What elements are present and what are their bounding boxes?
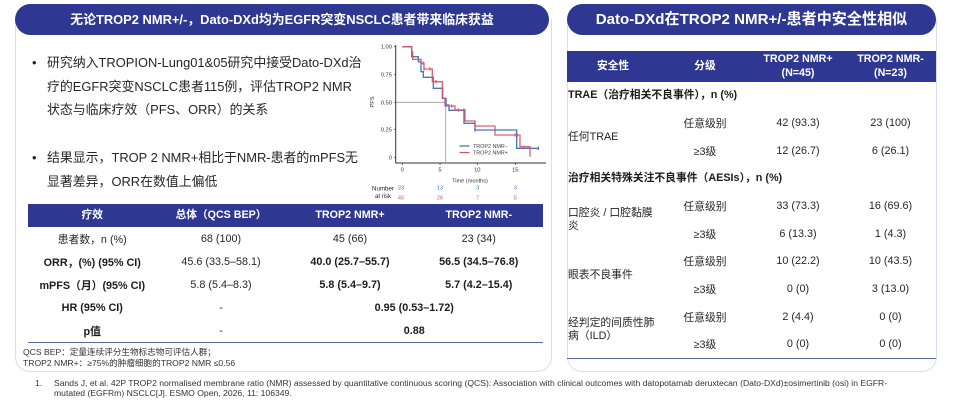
- table: efficacy results: ORR，(%) (95% CI): [44, 256, 141, 268]
- reference: [35, 378, 887, 398]
- text block: results bullet: •: [32, 150, 37, 165]
- axis tick labels: [370, 45, 519, 185]
- text block: study description bullet: 研究纳入TROPION-Lung01&05研究中接受Dato-DXd治: [47, 55, 361, 70]
- footnote: definitions: QCS BEP：定量连续评分生物标志物可评估人群；: [23, 347, 216, 357]
- table: safety results: 任意级别: [683, 312, 727, 324]
- axis tick labels: 10: [474, 168, 481, 174]
- PFS axis and ticks: [394, 45, 546, 165]
- table: efficacy results: 总体（QCS BEP）: [176, 209, 266, 221]
- table bottom rule: [567, 358, 936, 359]
- panel heading: safety: Dato-DXd在TROP2 NMR+/-患者中安全性相似: [596, 11, 907, 28]
- panel: safety: [567, 19, 937, 372]
- table: efficacy results: 23 (34): [462, 232, 496, 244]
- table: efficacy results: 5.7 (4.2–15.4): [445, 278, 512, 290]
- table: safety results: 16 (69.6): [869, 200, 912, 212]
- table: efficacy results: mPFS（月）(95% CI): [39, 280, 145, 292]
- table: safety results: 分级: [694, 60, 716, 72]
- table: safety results: TROP2 NMR-: [857, 53, 924, 65]
- table: safety results: 42 (93.3): [776, 117, 820, 129]
- legend: TROP2 NMR−: [473, 144, 508, 150]
- table: safety results: 安全性: [597, 60, 629, 72]
- panel: efficacy: [15, 19, 552, 372]
- number at risk table: 26: [437, 196, 443, 202]
- table: safety results: 10 (43.5): [869, 255, 912, 267]
- table: safety results: 10 (22.2): [776, 255, 820, 267]
- table: efficacy results: 40.0 (25.7–55.7): [310, 256, 390, 268]
- table: safety results: TRAE（治疗相关不良事件），n (%): [568, 89, 737, 101]
- table: safety results: TROP2 NMR+: [763, 53, 833, 65]
- table: safety results: (N=23): [874, 66, 907, 78]
- table: efficacy results: 0.95 (0.53–1.72): [375, 302, 454, 314]
- number at risk table: 7: [476, 196, 479, 202]
- axis tick labels: 0.50: [381, 100, 392, 106]
- footnote: definitions: [23, 347, 235, 368]
- axis tick labels: 0: [401, 168, 404, 174]
- table: efficacy results: 45 (66): [333, 232, 367, 244]
- reference: mutated (EGFRm) NSCLC[J]. ESMO Open, 2026, 11: 106349.: [54, 388, 292, 398]
- text block: results bullet: [32, 150, 358, 188]
- table: safety results: 12 (26.7): [776, 145, 820, 157]
- curve: TROP2 NMR-: [402, 47, 538, 150]
- table: safety results: 33 (73.3): [776, 200, 820, 212]
- table: efficacy results: TROP2 NMR-: [446, 209, 512, 221]
- table: efficacy results: [28, 204, 543, 338]
- reference: 1.: [35, 378, 42, 388]
- number at risk table: at risk: [375, 194, 392, 200]
- text block: results bullet: 结果显示，TROP 2 NMR+相比于NMR-患者的mPFS无: [47, 150, 358, 165]
- table: safety results: 0 (0): [879, 311, 902, 323]
- table: safety results: (N=45): [782, 66, 814, 78]
- table: efficacy results: HR (95% CI): [62, 302, 123, 314]
- table: efficacy results: 患者数，n (%): [58, 234, 127, 246]
- table: safety results: 23 (100): [870, 117, 911, 129]
- text block: results bullet: 显著差异，ORR在数值上偏低: [47, 174, 217, 188]
- table: safety results: 1 (4.3): [875, 228, 906, 240]
- number at risk table: 5: [514, 196, 517, 202]
- table: safety results: [567, 51, 936, 351]
- table: efficacy results: 68 (100): [201, 232, 241, 244]
- table: safety results: ≥3级: [694, 284, 716, 296]
- table: safety results: ≥3级: [694, 229, 716, 241]
- table: efficacy results: 0.88: [404, 324, 425, 336]
- legend: [460, 144, 508, 156]
- axis tick labels: Time (months): [452, 179, 488, 185]
- panel heading: efficacy: 无论TROP2 NMR+/-，Dato-DXd均为EGFR突变NSCLC患者带来临床获益: [70, 12, 494, 27]
- table: efficacy results: 疗效: [82, 209, 103, 221]
- table: efficacy results: p值: [84, 326, 101, 338]
- text block: study description bullet: [32, 55, 361, 117]
- table: safety results: 0 (0): [879, 338, 902, 350]
- axis tick labels: 0.25: [381, 128, 392, 134]
- table: safety results: 任意级别: [683, 256, 727, 268]
- axis tick labels: 5: [438, 168, 442, 174]
- table: safety results: 口腔炎 / 口腔黏膜: [568, 207, 653, 219]
- number at risk table: [372, 185, 517, 202]
- table: safety results: 任意级别: [683, 201, 727, 213]
- text block: study description bullet: 状态与临床疗效（PFS、ORR）的关系: [47, 102, 268, 117]
- curve: TROP2 NMR+: [402, 47, 530, 157]
- axis tick labels: 0.75: [381, 72, 392, 78]
- table: safety results: 0 (0): [787, 338, 809, 350]
- legend: TROP2 NMR+: [473, 150, 508, 156]
- number at risk table: 23: [398, 185, 404, 191]
- table: safety results: ≥3级: [694, 339, 716, 351]
- axis tick labels: PFS: [370, 96, 376, 108]
- table: safety results: 治疗相关特殊关注不良事件（AESIs），n (%): [568, 172, 782, 184]
- table bottom rule: [28, 342, 543, 343]
- table: safety results: 任意级别: [683, 118, 727, 130]
- axis tick labels: 1.00: [381, 45, 392, 51]
- table: safety results: 2 (4.4): [782, 311, 814, 323]
- table: efficacy results: 5.8 (5.4–9.7): [319, 278, 381, 290]
- number at risk table: 3: [476, 185, 479, 191]
- table: efficacy results: 45.6 (33.5–58.1): [181, 256, 261, 268]
- axis tick labels: 0: [389, 155, 392, 161]
- median reference lines: [396, 102, 446, 163]
- reference: Sands J, et al. 42P TROP2 normalised membrane ratio (NMR) assessed by quantitative continuous scoring (QCS): Association with clinical outcomes with datopotamab deruxtecan (Dato-DXd)±osimertinib (osi) in EGFR-: [54, 378, 887, 388]
- table: safety results: 0 (0): [787, 283, 809, 295]
- number at risk table: Number: [372, 185, 394, 192]
- table: safety results: 6 (26.1): [872, 145, 909, 157]
- text block: study description bullet: •: [32, 55, 37, 70]
- table: safety results: 眼表不良事件: [568, 269, 633, 281]
- axis tick labels: 15: [512, 168, 519, 174]
- footnote: definitions: TROP2 NMR+：≥75%的肿瘤细胞的TROP2 NMR ≤0.56: [23, 358, 235, 368]
- number at risk table: 3: [514, 185, 517, 191]
- table: safety results: 6 (13.3): [779, 228, 817, 240]
- panel heading: efficacy: [15, 4, 549, 35]
- table: efficacy results: 56.5 (34.5–76.8): [439, 256, 518, 268]
- table: safety results: ≥3级: [694, 146, 716, 158]
- table: efficacy results: TROP2 NMR+: [315, 209, 385, 221]
- table: efficacy results: -: [219, 302, 223, 314]
- table: efficacy results: -: [219, 324, 223, 336]
- table: efficacy results: 5.8 (5.4–8.3): [190, 278, 252, 290]
- chart: Kaplan-Meier PFS curve: [370, 44, 546, 202]
- table: safety results: 病（ILD）: [568, 330, 617, 342]
- table: safety results: 任何TRAE: [568, 131, 618, 143]
- table: safety results: 炎: [568, 220, 579, 232]
- number at risk table: 13: [437, 185, 443, 191]
- table: safety results: 3 (13.0): [872, 283, 909, 295]
- table: safety results: 经判定的间质性肺: [568, 317, 654, 329]
- panel heading: safety: [567, 4, 936, 35]
- text block: study description bullet: 疗的EGFR突变NSCLC患者115例，评估TROP2 NMR: [47, 78, 352, 94]
- number at risk table: 45: [398, 196, 404, 202]
